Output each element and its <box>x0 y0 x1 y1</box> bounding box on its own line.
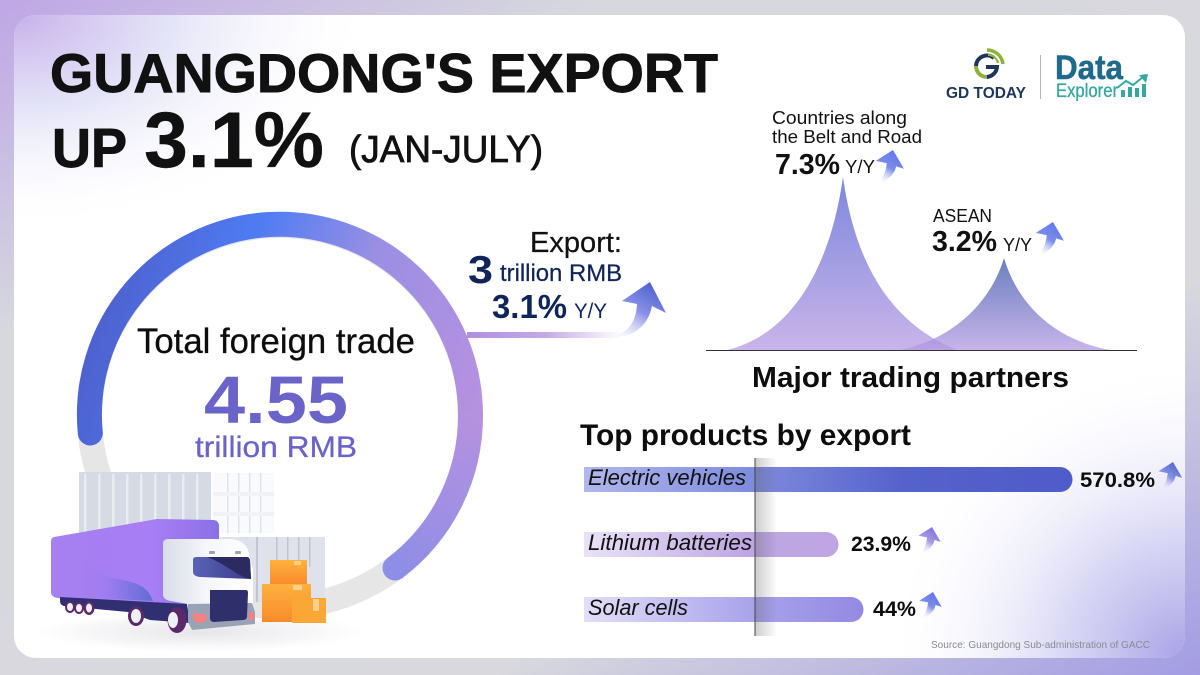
container: front right <box>220 537 325 602</box>
chart: major trading partners <box>706 107 1137 394</box>
icon: GD Today G mark <box>976 50 1003 77</box>
chart: top products by export <box>580 419 1182 636</box>
chart heading: Top products by export <box>580 419 911 452</box>
truck trailer <box>51 519 219 604</box>
ring chart: total foreign trade <box>89 224 470 607</box>
peak: Belt and Road <box>727 177 957 350</box>
label: Belt and Road: Countries along <box>772 107 907 128</box>
text block: export: 3 <box>468 249 493 292</box>
label: Belt and Road: Y/Y <box>845 157 875 177</box>
bar: electric vehicles <box>584 467 1072 492</box>
container: back left <box>79 472 211 534</box>
truck cab <box>163 539 253 604</box>
logo text: Explorer: Explorer <box>1056 81 1119 102</box>
label: Belt and Road: the Belt and Road <box>772 126 922 147</box>
floor shadow <box>35 612 365 652</box>
bar values: 570.8% <box>1080 469 1155 492</box>
label: Belt and Road <box>772 107 922 181</box>
icon: rising chart <box>1117 74 1148 97</box>
arrow: solar cells <box>919 592 942 619</box>
text block: export: 3.1% <box>492 288 567 325</box>
text block: total foreign trade: trillion RMB <box>195 431 357 464</box>
label: ASEAN: ASEAN <box>933 206 992 226</box>
label: ASEAN: Y/Y <box>1003 235 1032 255</box>
truck wheels <box>65 601 186 633</box>
title <box>50 42 718 184</box>
truck chassis <box>60 597 190 623</box>
label: ASEAN <box>932 206 1032 258</box>
text block: export <box>468 227 622 325</box>
illustration: truck and containers <box>35 472 365 652</box>
title: (JAN-JULY) <box>349 129 543 171</box>
peak: ASEAN <box>900 258 1110 350</box>
arrow: Belt and Road <box>876 150 904 184</box>
logo: GD Today and Data Explorer <box>946 49 1148 102</box>
text block: export: trillion RMB <box>500 260 622 287</box>
text block: total foreign trade: 4.55 <box>204 363 348 438</box>
bar labels: Electric vehicles <box>588 465 746 490</box>
bar: lithium batteries <box>584 532 838 557</box>
bar labels: Solar cells <box>588 595 688 620</box>
title: GUANGDONG'S EXPORT <box>50 42 718 104</box>
arrow: ASEAN <box>1036 222 1064 256</box>
logo text: GD TODAY: GD TODAY <box>946 85 1027 102</box>
text block: total foreign trade: Total foreign trade <box>137 322 415 361</box>
bar values: 44% <box>873 598 916 621</box>
label: Belt and Road: 7.3% <box>775 149 840 181</box>
arrow: lithium batteries <box>918 527 941 554</box>
arrow: electric vehicles <box>1158 462 1182 491</box>
bar values <box>851 469 1155 621</box>
cardboard boxes <box>262 560 326 623</box>
chart title: Major trading partners <box>752 362 1069 394</box>
text block: export: Export: <box>530 227 622 259</box>
logo text: Data: Data <box>1055 49 1124 87</box>
truck bumper and grill <box>188 590 255 630</box>
bar: solar cells <box>584 597 864 622</box>
bar values: 23.9% <box>851 533 911 556</box>
title: 3.1% <box>144 95 324 184</box>
source note: Source: Guangdong Sub-administration of GACC <box>931 639 1150 651</box>
title: UP <box>52 117 127 179</box>
text block: total foreign trade <box>137 322 415 464</box>
text block: export: Y/Y <box>574 300 607 323</box>
label: ASEAN: 3.2% <box>932 226 997 258</box>
bar labels <box>588 465 752 620</box>
container: pale back right <box>213 473 274 533</box>
bar labels: Lithium batteries <box>588 530 752 555</box>
connector arrow: export <box>467 282 666 338</box>
